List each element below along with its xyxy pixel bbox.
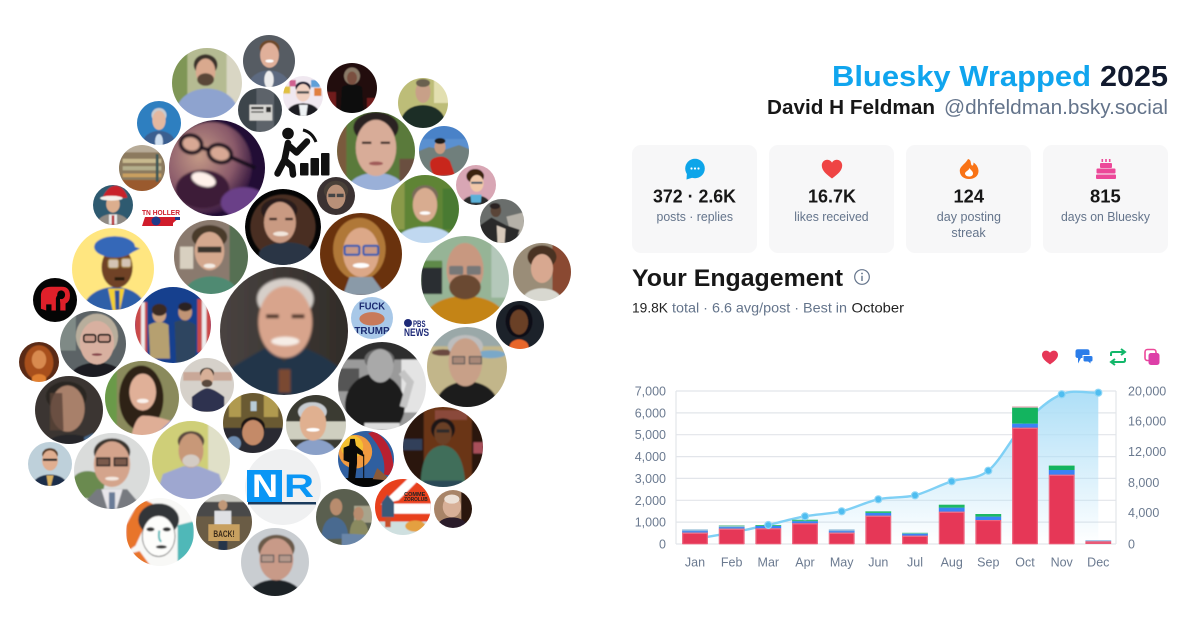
- avatar: anti-Trump badge: TRUMP: [354, 326, 390, 337]
- avatar: curly-haired man: [513, 243, 571, 301]
- left axis labels: 4,000: [635, 450, 666, 464]
- panel: stat days on Bluesky: [1043, 145, 1168, 253]
- avatar: bearded man in navy suit: [180, 358, 234, 412]
- stat value: 815: [1090, 186, 1121, 206]
- avatar: woman in black dress: [327, 63, 377, 113]
- bar: Feb: [719, 525, 745, 544]
- left axis labels: [635, 384, 666, 552]
- avatar: smiling man against foliage: [337, 112, 415, 190]
- icon: reposts arrows: [1111, 349, 1125, 365]
- profile name and handle: David H Feldman: [767, 97, 935, 119]
- month axis labels: Jun: [868, 556, 888, 570]
- stat label: posts · replies: [656, 209, 733, 224]
- avatar: hiker silhouette logo: [332, 425, 400, 493]
- avatar: red comic cover: [369, 473, 437, 541]
- panel: stat likes received: [769, 145, 894, 253]
- cumulative line: [695, 392, 1098, 539]
- avatar: man in blue shirt: [172, 48, 242, 118]
- avatar: NR logo: N: [252, 468, 278, 504]
- avatar: anti-Trump badge: FUCK: [359, 302, 386, 313]
- right axis labels: 12,000: [1128, 445, 1166, 459]
- avatar: anti-Trump badge: [351, 297, 393, 339]
- month axis labels: Jan: [685, 556, 705, 570]
- panel: stat posts and replies: [632, 145, 757, 253]
- avatar: cartoon man in UVA cap: [72, 228, 154, 310]
- avatar: protester with sign: BACK!: [213, 529, 235, 540]
- logo: PBS News: NEWS: [404, 327, 429, 339]
- month axis labels: Dec: [1087, 556, 1109, 570]
- bar: Jan: [682, 529, 708, 544]
- avatar: man with black ring: [245, 189, 321, 267]
- left axis labels: 5,000: [635, 428, 666, 442]
- bar: Jul: [902, 533, 928, 544]
- avatar: man with glasses, dark: [317, 177, 355, 215]
- avatar: couple with US flags: [135, 287, 211, 363]
- icon: replies chat bubbles: [1076, 349, 1093, 364]
- avatar: man in dark portrait: [35, 376, 103, 444]
- avatar: man in red jacket with mountains: [419, 126, 469, 176]
- stat label: day posting: [937, 209, 1001, 224]
- icon: man with pickaxe and rising bars: [278, 128, 330, 176]
- avatar: cartoon face with teal nose: [126, 498, 194, 566]
- bar: May: [829, 529, 855, 544]
- avatar: man in grey suit: [74, 433, 150, 509]
- avatar: woman with brown hair: [105, 361, 179, 435]
- avatar: large central man with bolo tie: [220, 267, 348, 395]
- left axis labels: 6,000: [635, 406, 666, 420]
- month axis labels: Feb: [721, 556, 743, 570]
- title: Bluesky Wrapped 2025: 2025: [1100, 61, 1168, 93]
- cumulative data points: [765, 389, 1102, 528]
- month axis labels: Jul: [907, 556, 923, 570]
- avatar: woman in front of bookshelves: [395, 399, 491, 495]
- avatar: red elephant logo: [33, 278, 77, 322]
- avatar: man with blue glasses: [320, 213, 402, 295]
- month axis labels: Aug: [941, 556, 963, 570]
- avatar: man in dark coat: [480, 199, 524, 243]
- avatar: man with glasses at bottom: [241, 528, 309, 596]
- engagement summary text: 19.8K: [632, 300, 669, 316]
- stat value: 124: [954, 186, 984, 206]
- month axis labels: Oct: [1015, 556, 1035, 570]
- avatar: curly-haired man with glasses: [174, 220, 248, 294]
- heading: Your Engagement: Your Engagement: [632, 265, 843, 292]
- avatar: man on blue background: [137, 101, 181, 145]
- right axis labels: 16,000: [1128, 414, 1166, 428]
- bar: Jun: [865, 511, 891, 544]
- bars: [682, 406, 1111, 544]
- avatar: cartoon man with pink background: [456, 165, 496, 205]
- avatar: man with sunglasses in mustard shirt: [421, 236, 509, 324]
- logo: PBS News: PBS: [413, 319, 426, 329]
- stat label: streak: [951, 225, 986, 240]
- avatar: protester with sign: [196, 494, 252, 550]
- left axis labels: 2,000: [635, 494, 666, 508]
- cumulative area: [695, 392, 1098, 544]
- month axis labels: Nov: [1051, 556, 1074, 570]
- logo: TN Holler: [142, 208, 181, 226]
- chart: monthly engagement: [635, 384, 1166, 570]
- stat label: days on Bluesky: [1061, 209, 1150, 224]
- right axis labels: 0: [1128, 538, 1135, 552]
- avatar: woman with orange hair: [19, 342, 59, 382]
- stat value: 16.7K: [808, 186, 856, 206]
- bar: Mar: [755, 525, 781, 544]
- icon: info: [855, 270, 869, 284]
- engagement summary text: October: [852, 300, 904, 316]
- profile name and handle: @dhfeldman.bsky.social: [944, 97, 1168, 119]
- bar: Dec: [1085, 540, 1111, 544]
- bar: Nov: [1049, 465, 1075, 544]
- avatar: man in tall grass: [391, 175, 459, 243]
- month axis labels: Apr: [795, 556, 815, 570]
- avatar: two men in cockpit: [310, 483, 378, 551]
- left axis labels: 7,000: [635, 384, 666, 398]
- avatar: man with grey hair and zeppelins: [419, 319, 515, 426]
- left axis labels: 1,000: [635, 516, 666, 530]
- bar: Oct: [1012, 406, 1038, 544]
- avatar: man in dark shirt: [398, 78, 448, 128]
- icon: cake: [1096, 159, 1116, 179]
- icon: quotes copy: [1145, 350, 1160, 365]
- stat value: 372 · 2.6K: [653, 186, 736, 206]
- profile name and handle: [767, 97, 1168, 119]
- right axis labels: 20,000: [1128, 384, 1166, 398]
- panel: stat day posting streak: [906, 145, 1031, 253]
- month axis labels: Sep: [977, 556, 999, 570]
- bar: Apr: [792, 520, 818, 544]
- icon: chat bubble: [685, 159, 705, 180]
- stat label: [937, 209, 1001, 240]
- bar: Sep: [975, 514, 1001, 544]
- avatar: small man with glasses: [28, 442, 72, 486]
- icon: likes heart: [1042, 351, 1058, 364]
- chart legend icons: [1042, 349, 1160, 365]
- avatar: woman with glasses: [60, 311, 126, 377]
- avatar: building: [119, 145, 165, 191]
- right axis labels: 8,000: [1128, 476, 1159, 490]
- avatar: bald man: [430, 486, 476, 537]
- right axis labels: 4,000: [1128, 506, 1159, 520]
- panel: avatar bubble cluster: [15, 30, 577, 615]
- chart grid: [676, 391, 1116, 544]
- avatar: man in cathedral: [223, 393, 283, 453]
- avatar: poster on pole: [238, 88, 282, 132]
- avatar: red comic cover: COMME: [404, 492, 426, 498]
- month axis labels: May: [830, 556, 854, 570]
- avatar: NR logo: [245, 449, 321, 525]
- right axis labels: [1128, 384, 1166, 552]
- avatar: man in plaid shirt: [152, 421, 230, 499]
- avatar: smiling man with glasses, purple tint: [169, 120, 265, 216]
- logo: TN Holler: TN HOLLER: [142, 208, 181, 217]
- avatar: smiling older man in blue plaid: [280, 389, 352, 471]
- avatar: man in santa hat: [93, 185, 133, 225]
- avatar: woman with orange top: [491, 296, 549, 355]
- avatar: NR logo: R: [284, 468, 314, 504]
- avatar: man in suit: [243, 35, 295, 87]
- left axis labels: 0: [659, 538, 666, 552]
- month axis labels: [685, 556, 1109, 570]
- avatar: illustrated man on pixel background: [283, 76, 323, 116]
- stat label: likes received: [794, 209, 869, 224]
- avatar: red comic cover: ZOROLUB: [404, 497, 428, 503]
- logo: PBS News: [404, 319, 429, 339]
- icon: flame: [960, 159, 978, 179]
- left axis labels: 3,000: [635, 472, 666, 486]
- title: Bluesky Wrapped 2025: Bluesky Wrapped: [832, 61, 1091, 93]
- month axis labels: Mar: [758, 556, 779, 570]
- engagement summary text: [632, 300, 904, 316]
- icon: heart: [822, 160, 842, 178]
- bar: Aug: [939, 505, 965, 544]
- avatar: black-and-white man thinking: [329, 333, 435, 439]
- engagement summary text: total · 6.6 avg/post · Best in: [672, 300, 847, 316]
